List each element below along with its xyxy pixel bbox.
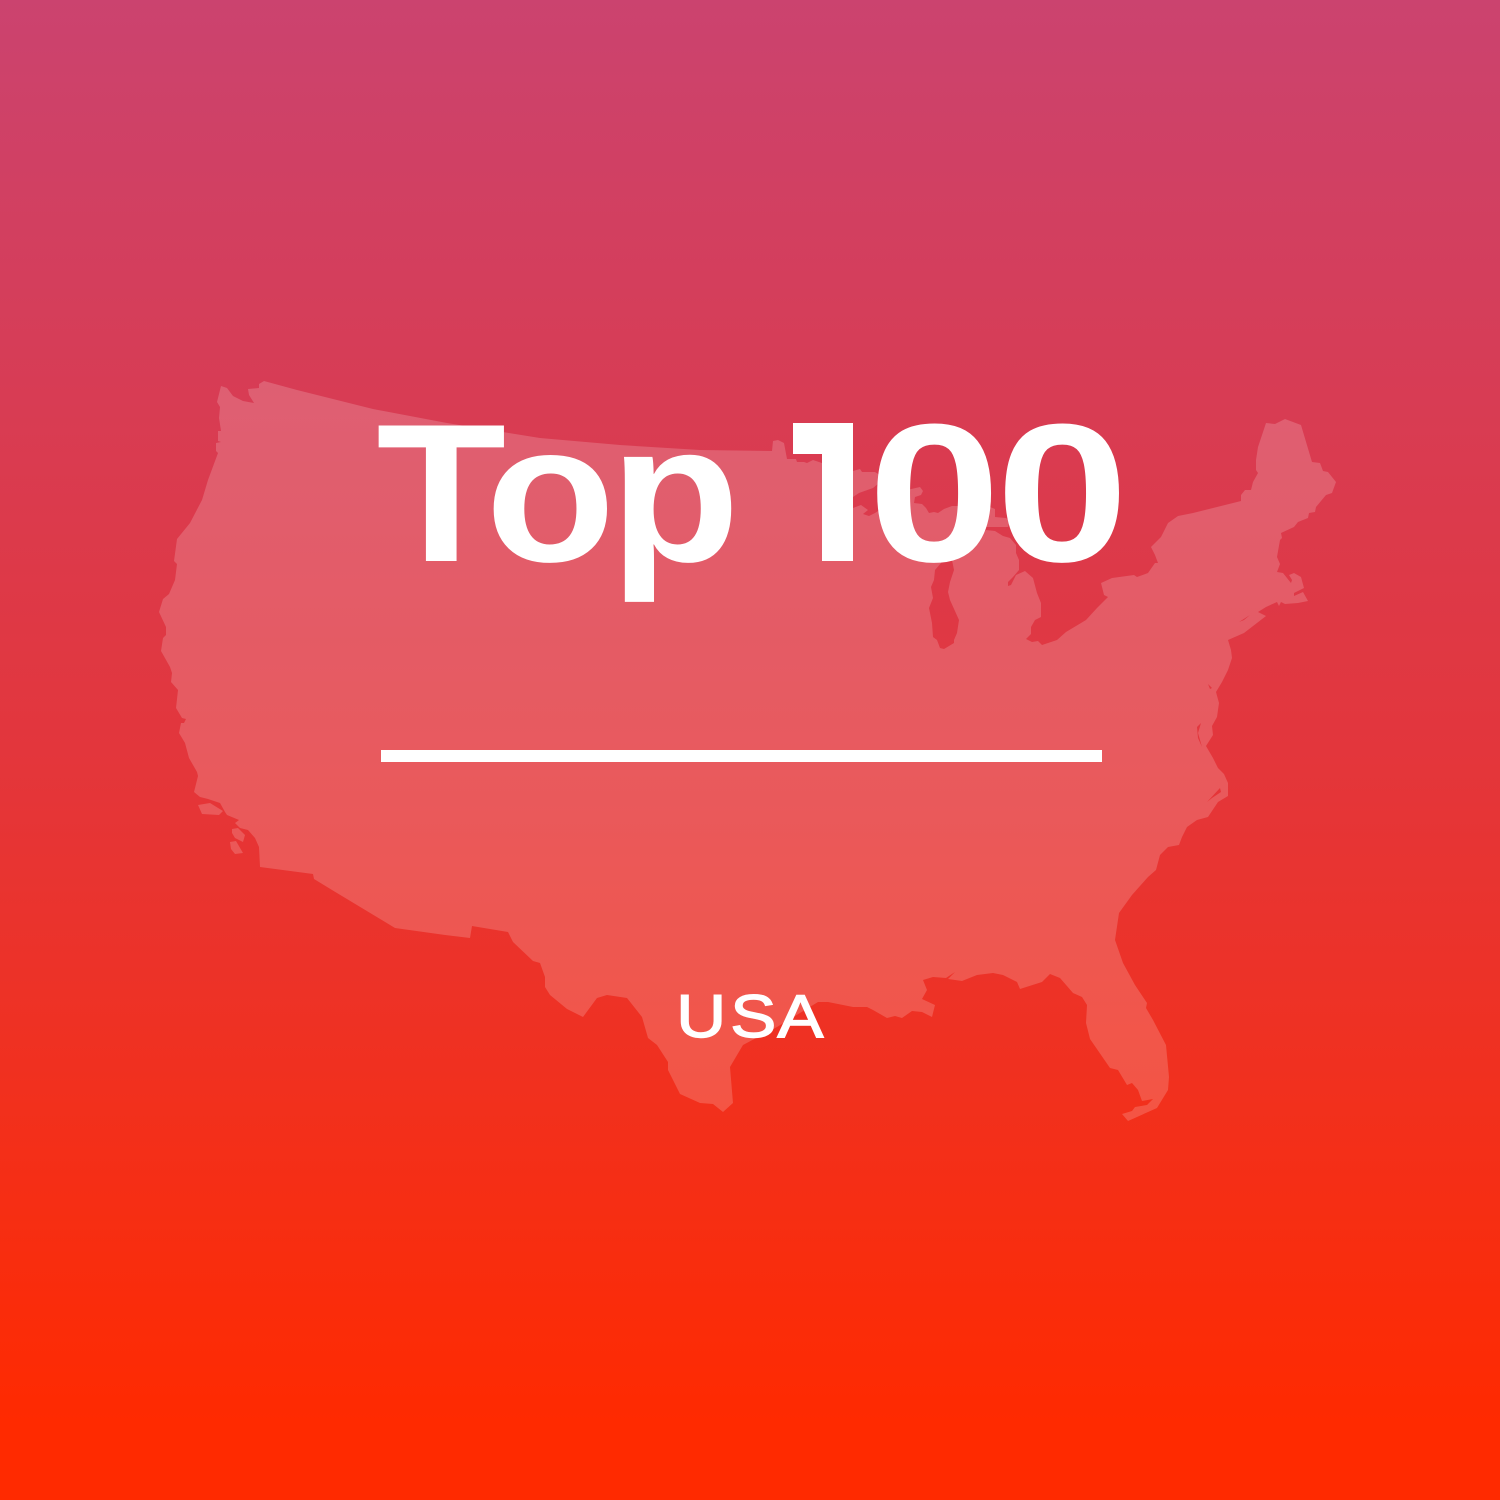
map: contiguous USA silhouette bbox=[159, 381, 1336, 1121]
title: 1 bbox=[765, 383, 901, 604]
title: 00 bbox=[868, 384, 1129, 603]
title bbox=[378, 423, 1119, 602]
title: Top bbox=[376, 383, 740, 603]
divider rule bbox=[381, 750, 1102, 762]
subtitle: USA bbox=[676, 982, 823, 1050]
